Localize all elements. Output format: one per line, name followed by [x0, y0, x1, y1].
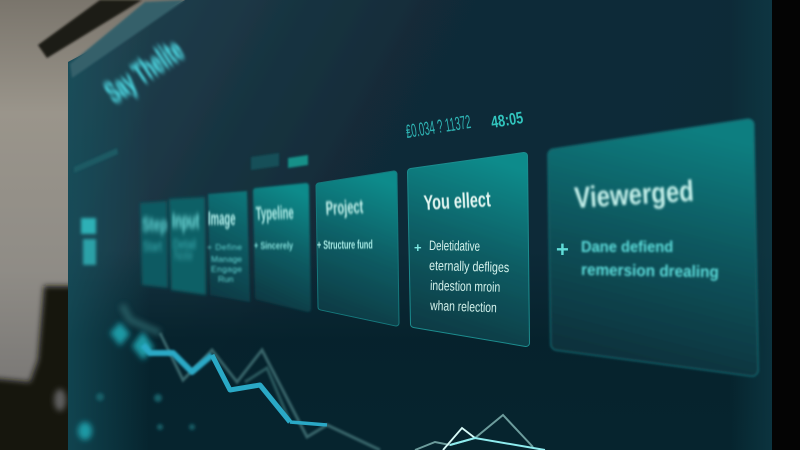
projector bar	[38, 0, 142, 58]
body text: you elect: eternally defliges	[429, 258, 509, 275]
panel: blurred card two: Note	[174, 248, 193, 264]
panel: far left blurred column	[81, 218, 96, 265]
timeline title: Say Thelite	[99, 33, 190, 110]
body text: you elect: indestion mroin	[430, 278, 500, 295]
screen right glow	[730, 0, 772, 450]
body text: viewerged: remersion drealing	[581, 262, 719, 282]
right dark bezel	[765, 0, 800, 450]
screen left glow	[68, 20, 150, 450]
panel: project card	[317, 174, 396, 323]
line chart: back series	[122, 305, 533, 450]
panel: viewerged card	[554, 125, 752, 370]
header chips	[251, 153, 308, 170]
chart glow	[78, 322, 154, 440]
dark furniture silhouette	[0, 286, 75, 450]
heading: viewerged: Viewerged	[573, 173, 695, 215]
line chart: bright series	[443, 428, 545, 450]
body text: you elect	[429, 237, 509, 316]
panel: blurred card three: Engage	[211, 264, 242, 274]
icon: plus marker: +	[556, 237, 569, 262]
panel: blurred card three: + Define	[207, 242, 242, 252]
line chart: main series	[143, 345, 327, 425]
panel: blurred card three: Manage	[211, 254, 242, 264]
body text: viewerged	[581, 239, 719, 282]
screen top strip	[70, 0, 185, 78]
panel: blurred card one	[140, 201, 168, 288]
panel: blurred card one: Start	[143, 239, 163, 255]
body text: you elect: whan relection	[429, 298, 497, 316]
panel: project card: Project	[325, 197, 364, 220]
panel: typeline card: + Sincerely	[254, 240, 293, 251]
panel: blurred card two: Detail	[173, 237, 196, 253]
panel: blurred card two	[169, 197, 206, 295]
heading: you elect: You ellect	[423, 188, 491, 215]
screen lower shade	[68, 250, 772, 450]
header label left	[74, 148, 118, 173]
panel: project card: + Structure fund	[317, 239, 373, 253]
grey blob in furniture	[54, 389, 66, 411]
numeric readout: ₤0.034 ? 11372	[404, 112, 472, 143]
lower left chart marks	[96, 393, 195, 430]
body text: you elect: Deletidative	[429, 237, 480, 254]
panel: blurred card two: Input	[172, 209, 200, 233]
panel: you elect card	[411, 156, 526, 343]
numeric readout	[404, 110, 525, 143]
panel: blurred card three: Run	[218, 274, 234, 284]
background wall	[0, 0, 200, 450]
numeric readout: 48:05	[490, 110, 525, 132]
panel: typeline card	[254, 186, 308, 309]
panel: blurred card three	[207, 191, 250, 302]
panel: blurred card three: Image	[208, 208, 236, 230]
body text: viewerged: Dane defiend	[581, 239, 673, 256]
icon: plus marker: +	[414, 240, 422, 255]
panel: typeline card: Typeline	[255, 202, 294, 225]
panel: blurred card one: Step	[142, 214, 167, 236]
